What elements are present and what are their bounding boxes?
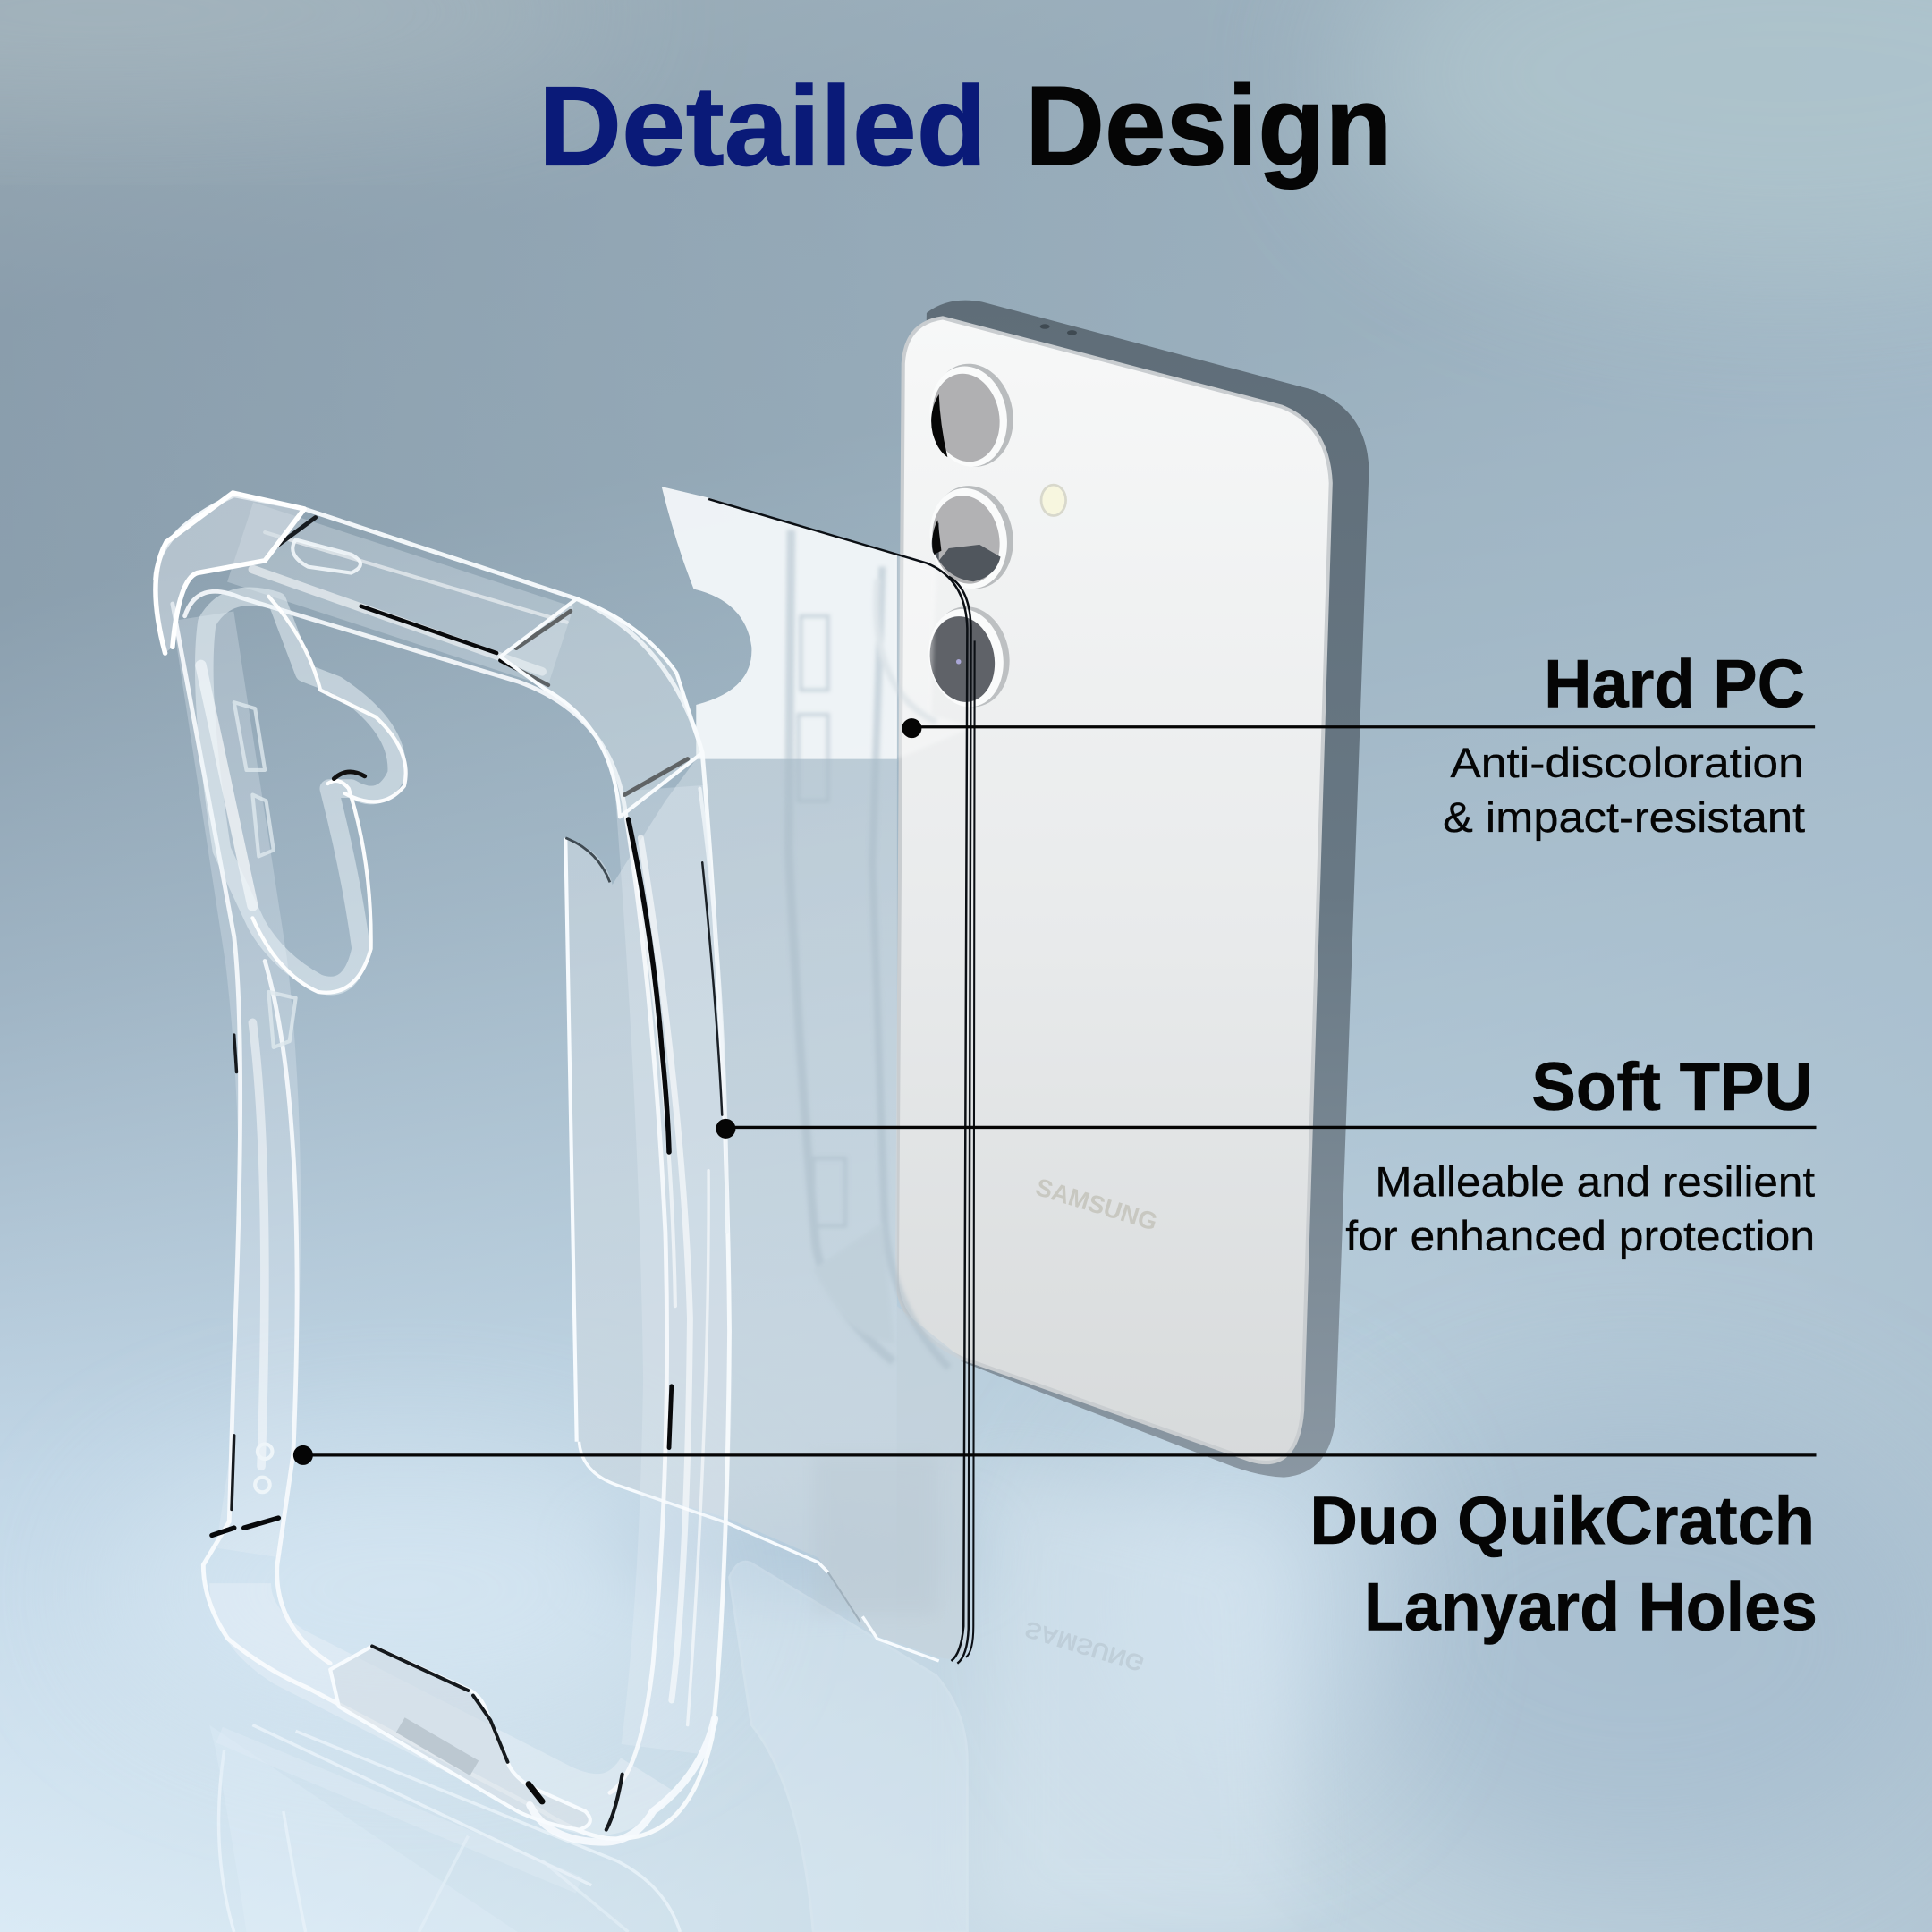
title word: Detailed: Detailed — [538, 63, 987, 190]
ghost bumper seen through panel — [789, 530, 949, 1368]
heading — [1309, 1483, 1818, 1646]
phone frame side — [911, 301, 1368, 1478]
leader line and dot — [716, 1119, 1817, 1139]
heading: Lanyard Holes — [1364, 1570, 1818, 1646]
bumper inner edges — [185, 591, 667, 1792]
hard PC back panel — [565, 487, 975, 1664]
callout: Duo QuikCratch Lanyard Holes — [293, 1445, 1818, 1646]
SAMSUNG logo: SAMSUNG — [1032, 1173, 1161, 1236]
callout: Hard PC — [902, 647, 1815, 841]
lanyard holes — [255, 1444, 272, 1492]
phone back face — [897, 318, 1331, 1462]
panel lower section over floor — [897, 1306, 970, 1659]
callout: Soft TPU — [716, 1049, 1817, 1259]
bumper translucent body: bottom band — [241, 1583, 647, 1805]
right rail black reflections — [629, 819, 669, 1152]
bottom corner — [530, 1719, 715, 1842]
bumper reflection on floor — [209, 1725, 680, 1932]
title — [538, 63, 1393, 190]
camera lens 1 — [922, 357, 1021, 473]
heading: Hard PC — [1544, 647, 1805, 723]
heading: Duo QuikCratch — [1309, 1483, 1815, 1559]
description — [1345, 1159, 1815, 1259]
right rail lines — [640, 838, 690, 1700]
camera lens 3 — [921, 600, 1017, 714]
title word: Design: Design — [1025, 63, 1393, 190]
top port slot — [292, 539, 360, 573]
description — [1443, 740, 1805, 841]
left rail lines — [173, 604, 330, 1664]
top edge black reflection — [361, 606, 548, 685]
phone — [897, 301, 1368, 1478]
side button ghosts — [234, 702, 296, 1047]
bumper outer edges — [156, 496, 730, 1839]
panel body — [567, 487, 897, 1574]
bumper translucent body: left rail — [203, 616, 270, 1553]
top left corner — [156, 493, 304, 653]
top right corner block — [500, 598, 702, 817]
camera flash — [1041, 485, 1066, 516]
bumper translucent body: top band — [241, 542, 561, 647]
description: & impact-resistant — [1443, 794, 1805, 841]
description: for enhanced protection — [1345, 1213, 1815, 1259]
reflected SAMSUNG logo: SAMSUNG — [1021, 1615, 1148, 1677]
upper bright area — [662, 487, 897, 759]
phone reflection on floor — [986, 1466, 1299, 1932]
description: Anti-discoloration — [1450, 740, 1804, 786]
description: Malleable and resilient — [1375, 1159, 1815, 1206]
leader line and dot — [293, 1445, 1817, 1465]
floor reflections — [209, 1466, 1299, 1932]
leader line and dot — [902, 718, 1815, 738]
top mic holes — [1040, 324, 1077, 335]
camera cut-out loop — [204, 597, 397, 986]
top band highlights — [252, 569, 542, 672]
lower left black reflection — [212, 1518, 278, 1535]
panel bottom edge highlights — [565, 838, 939, 1661]
heading: Soft TPU — [1531, 1049, 1812, 1125]
phone edge glow through panel — [897, 555, 973, 759]
case back reflection on floor — [730, 1562, 967, 1932]
panel black edge lines — [708, 499, 975, 1664]
bottom tab — [330, 1646, 590, 1830]
camera lens 2 — [922, 479, 1021, 595]
bumper translucent body: right rail — [659, 789, 688, 1750]
soft TPU bumper — [156, 493, 730, 1842]
